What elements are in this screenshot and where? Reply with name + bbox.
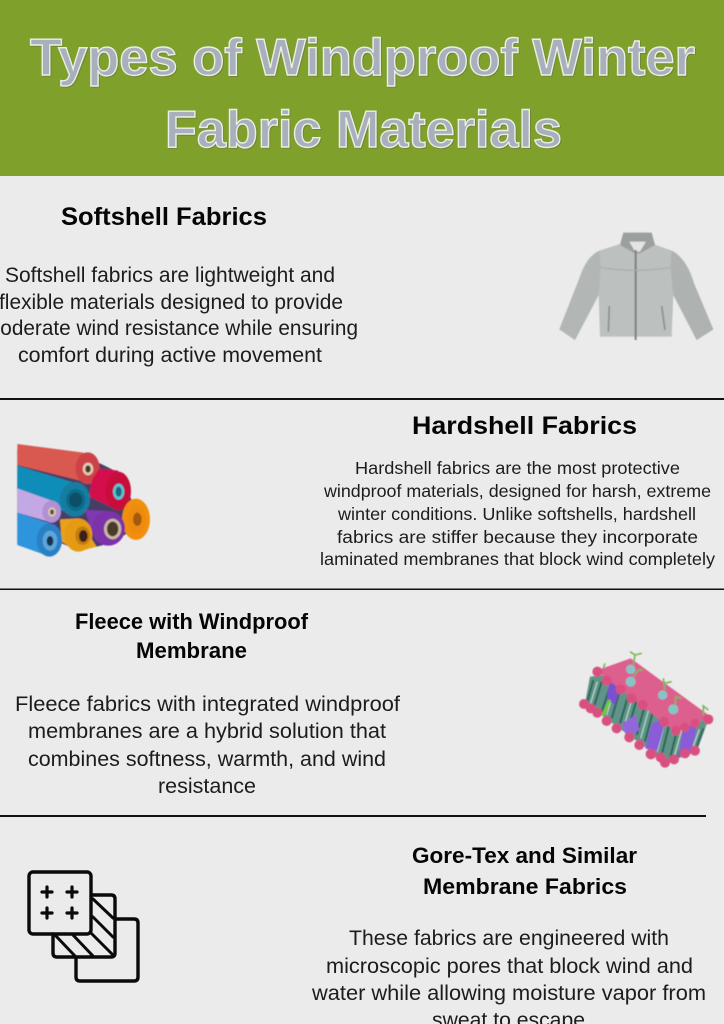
- heading: hardshell fabrics: Hardshell Fabrics: [412, 412, 637, 440]
- title: Fabric Materials: [165, 101, 562, 159]
- panel: hardshell fabrics: [0, 400, 724, 589]
- text: hardshell description: Hardshell fabrics are the most protective: [355, 458, 680, 478]
- icon: membrane cross-section: [579, 652, 713, 768]
- divider: [0, 398, 724, 400]
- front dotted square: [29, 872, 91, 934]
- text: softshell description: flexible materials designed to provide: [0, 290, 343, 314]
- panel: fleece with windproof membrane: [0, 590, 724, 815]
- title: Types of Windproof Winter: [31, 30, 696, 88]
- heading: gore-tex and similar membrane fabrics: Gore-Tex and Similar: [412, 843, 637, 868]
- lavender roll: [17, 488, 61, 523]
- icon: layered membrane squares: [29, 872, 138, 981]
- purple roll: [85, 510, 125, 546]
- top lipid layer: [596, 658, 712, 731]
- panel: softshell fabrics: [0, 176, 724, 399]
- heading: fleece with windproof membrane: [75, 609, 308, 663]
- teal receptors: [626, 665, 678, 714]
- header banner: [0, 0, 724, 176]
- icon: colourful fabric rolls: [17, 444, 150, 557]
- red roll: [17, 444, 100, 484]
- membrane core: [585, 673, 708, 763]
- middle hatched square: [53, 895, 115, 957]
- text: fleece description: [15, 692, 400, 798]
- heading: fleece with windproof membrane: Membrane: [136, 638, 247, 663]
- text: hardshell description: [320, 458, 715, 569]
- heading: fleece with windproof membrane: Fleece with Windproof: [75, 609, 308, 634]
- pink roll: [89, 468, 131, 510]
- divider: [0, 815, 706, 817]
- heading: gore-tex and similar membrane fabrics: [412, 843, 637, 899]
- panel: gore-tex and similar membrane fabrics: [0, 817, 724, 1024]
- yellow roll: [60, 518, 97, 552]
- heading: gore-tex and similar membrane fabrics: Membrane Fabrics: [423, 874, 627, 899]
- text: hardshell description: fabrics are stiffer because they incorporate: [337, 527, 698, 547]
- teal roll: [17, 466, 90, 517]
- text: hardshell description: windproof materials, designed for harsh, extreme: [323, 481, 711, 501]
- orange roll: [122, 499, 150, 540]
- icon: grey softshell jacket: [559, 233, 713, 340]
- text: softshell description: Softshell fabrics are lightweight and: [5, 263, 335, 287]
- text: gore-tex description: [311, 926, 706, 1024]
- text: fleece description: resistance: [158, 774, 256, 798]
- text: fleece description: Fleece fabrics with integrated windproof: [15, 692, 400, 716]
- divider: [0, 588, 724, 590]
- text: softshell description: [0, 263, 358, 367]
- title: [30, 29, 696, 160]
- title: Fabric Materials: [166, 102, 563, 160]
- text: gore-tex description: microscopic pores that block wind and: [326, 954, 693, 978]
- heading: softshell fabrics: Softshell Fabrics: [61, 203, 267, 231]
- text: gore-tex description: water while allowing moisture vapor from: [311, 981, 706, 1005]
- shadow backing: [17, 450, 133, 555]
- text: fleece description: membranes are a hybrid solution that: [28, 719, 386, 743]
- bottom lipid layer: [579, 699, 700, 768]
- text: gore-tex description: These fabrics are engineered with: [349, 926, 669, 950]
- text: fleece description: combines softness, warmth, and wind: [28, 747, 386, 771]
- title: Types of Windproof Winter: [30, 29, 695, 87]
- back square: [76, 919, 138, 981]
- purple proteins: [607, 678, 623, 705]
- blue roll: [17, 513, 62, 557]
- text: hardshell description: laminated membranes that block wind completely: [320, 549, 715, 569]
- text: softshell description: comfort during active movement: [18, 343, 322, 367]
- text: hardshell description: winter conditions. Unlike softshells, hardshell: [337, 504, 696, 524]
